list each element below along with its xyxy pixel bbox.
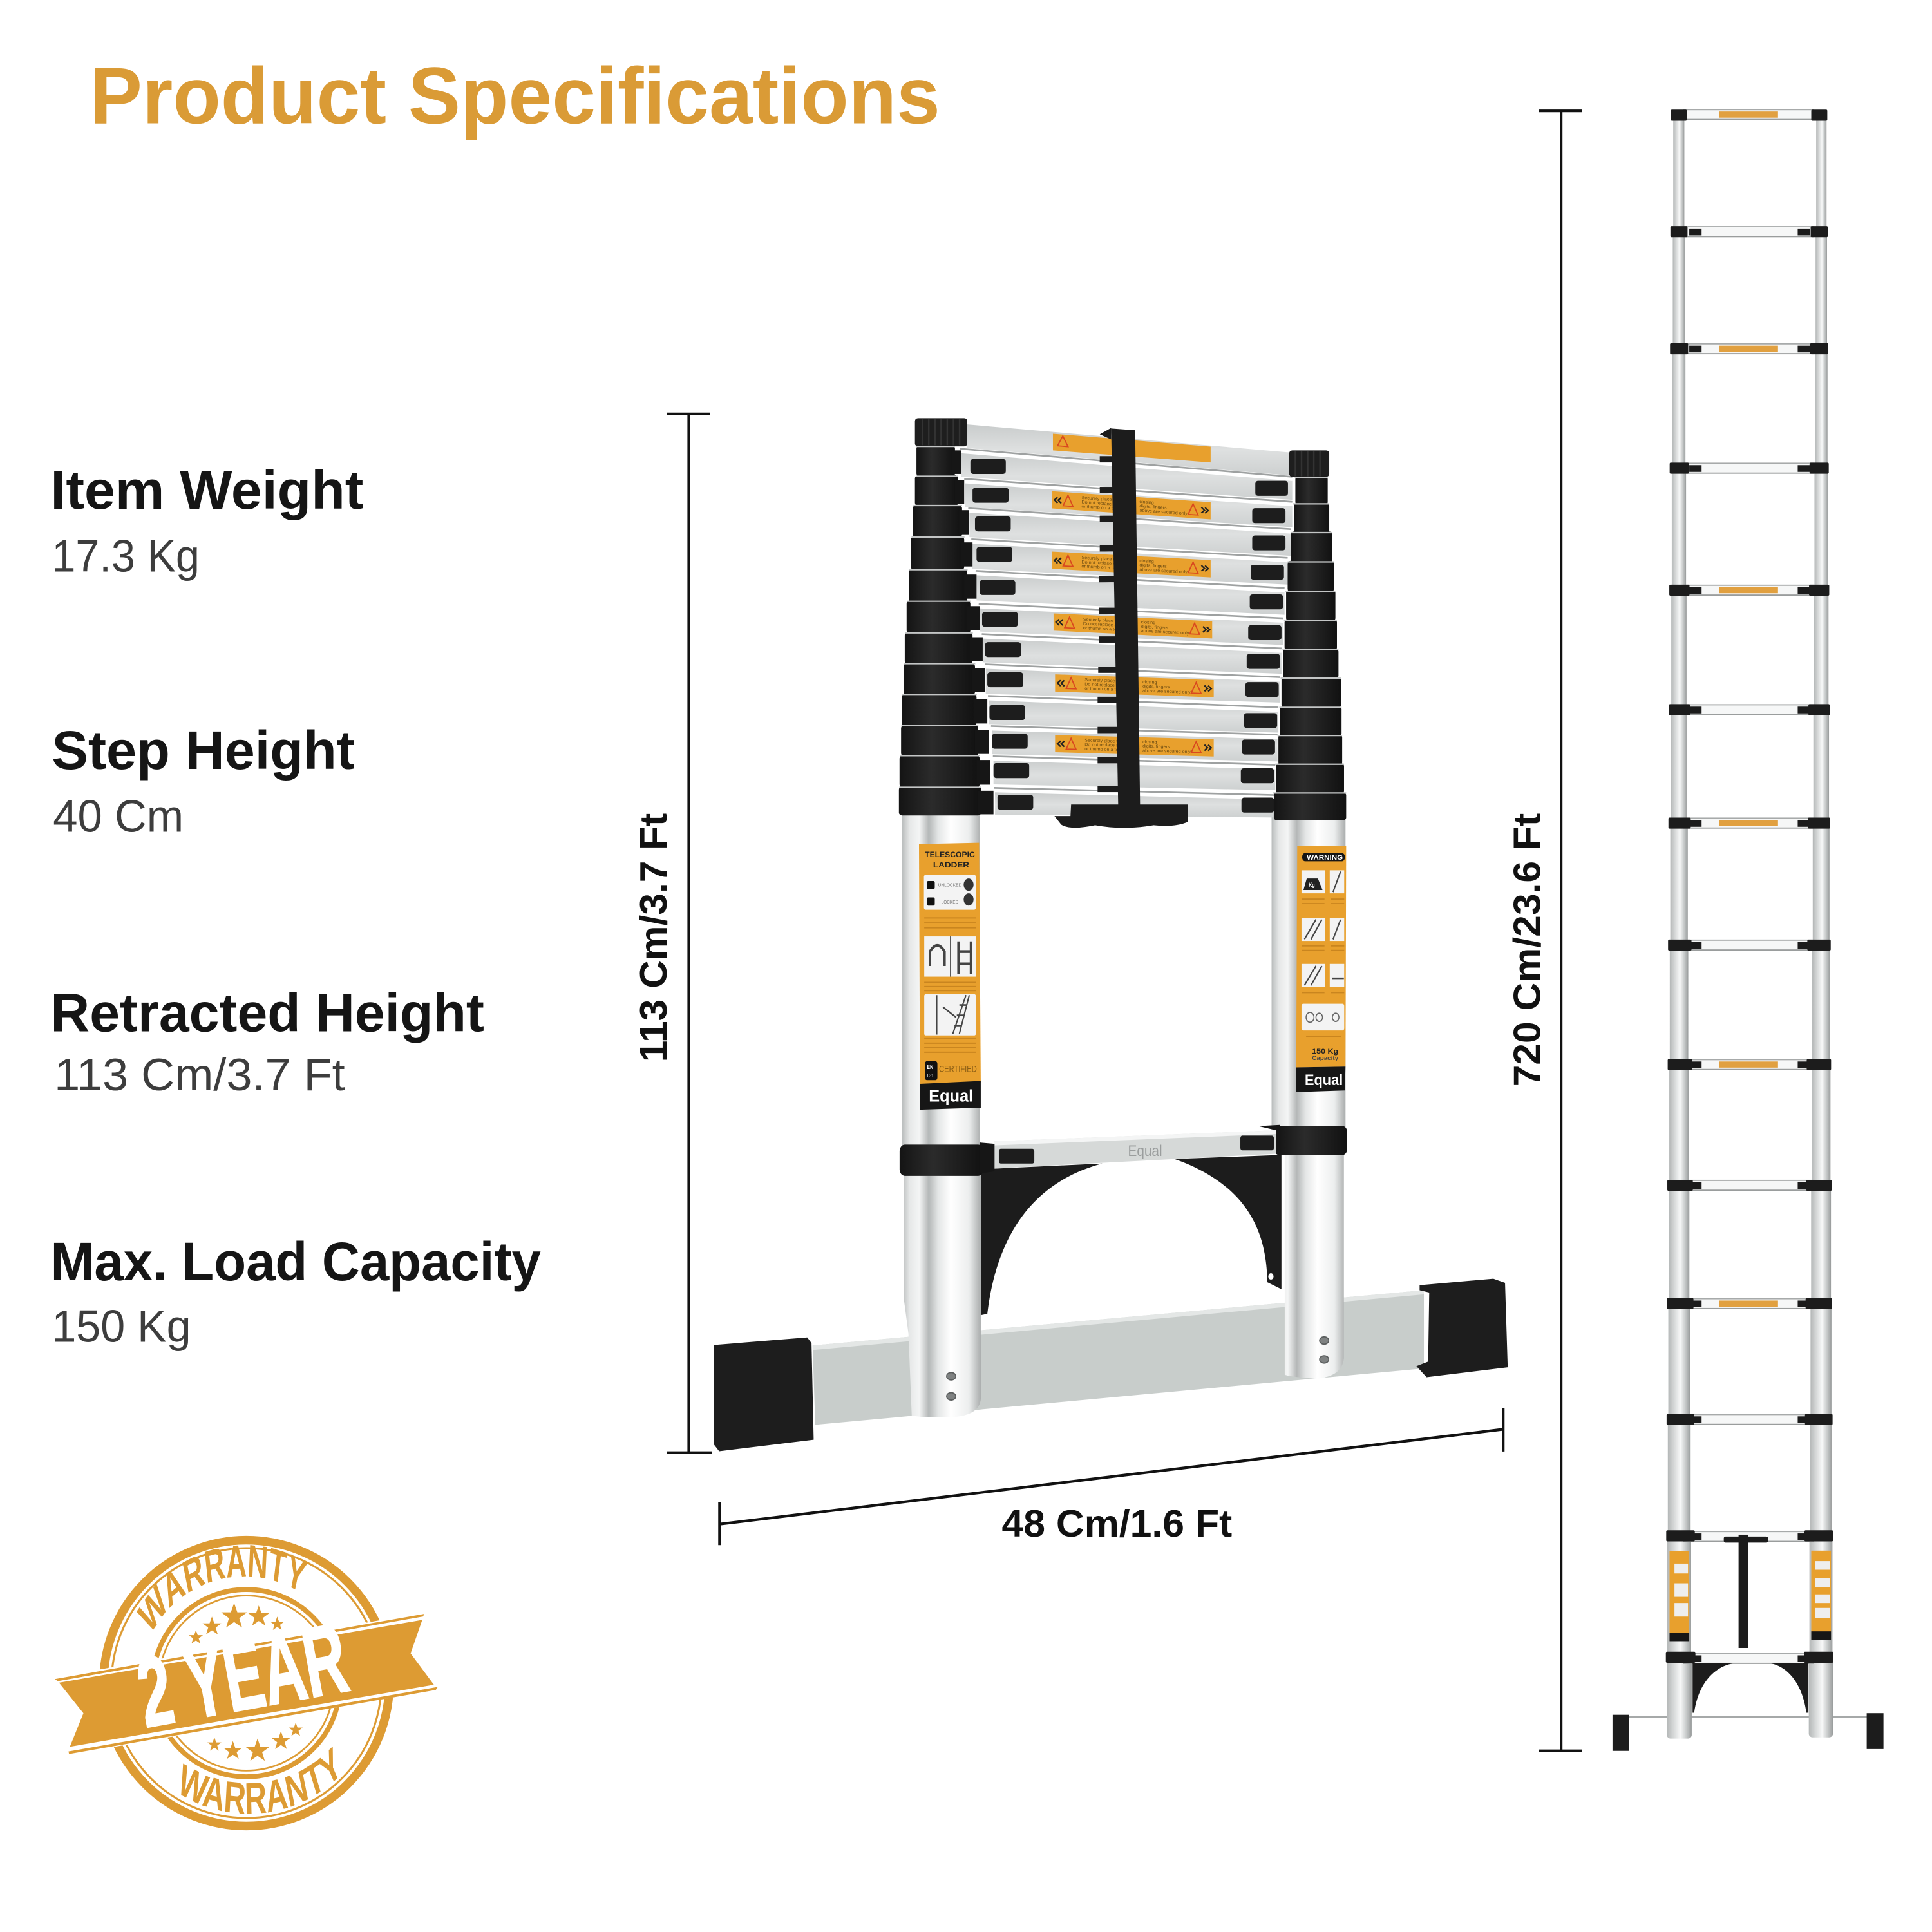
bracket: right arch: [1175, 1155, 1282, 1289]
warranty text top: WARRANTY: [137, 1545, 308, 1630]
sticker: telescopic ladder: 131: [927, 1072, 934, 1079]
sticker: warning: Kg: [1309, 882, 1315, 888]
spec: step height: 40 Cm: [53, 791, 184, 842]
sticker: telescopic ladder: LOCKED: [942, 900, 959, 905]
strap and T-handle: [1054, 428, 1188, 828]
right collars: [1273, 450, 1346, 820]
spec: retracted height: [50, 982, 484, 1101]
rungs: [1683, 109, 1814, 1664]
screws: [947, 1337, 1329, 1400]
pole stickers: [1669, 1551, 1831, 1641]
spec: retracted height: Retracted Height: [50, 982, 484, 1043]
spec: item weight: 17.3 Kg: [52, 531, 200, 582]
dimension: retracted height 113 cm: 113 Cm/3.7 Ft: [632, 813, 675, 1062]
rung stickers: [1719, 111, 1778, 1307]
stars: [189, 1603, 303, 1761]
mini brackets: [1692, 1663, 1808, 1712]
lower rung: [994, 1130, 1278, 1168]
retracted ladder: [714, 418, 1508, 1452]
left collars: [899, 418, 994, 815]
seal rings: [104, 1540, 390, 1826]
left collars: [1666, 109, 1696, 1663]
rope and T-handle: [1724, 1535, 1768, 1648]
spec: item weight: [50, 460, 363, 582]
left foot: [1613, 1715, 1629, 1751]
sticker: warning: WARNING: [1307, 854, 1343, 862]
left pole: [902, 812, 981, 1417]
lower rung: Equal: [1128, 1142, 1162, 1160]
right rail: [1809, 115, 1833, 1738]
ribbon: [53, 1612, 439, 1756]
sticker: telescopic ladder: EN: [927, 1064, 933, 1070]
right foot: [1867, 1713, 1884, 1749]
dimension: extended height 720 cm: [1506, 111, 1582, 1751]
spec: max load capacity: 150 Kg: [52, 1302, 191, 1352]
bracket: left arch: [981, 1164, 1103, 1315]
rung bars: [961, 424, 1293, 817]
base crossbar and feet: [714, 1279, 1508, 1452]
warranty badge: [55, 1535, 438, 1830]
warranty text bottom: WARRANTY: [181, 1747, 337, 1814]
title: Product Specifications: [90, 51, 940, 140]
spec: max load capacity: [50, 1231, 541, 1352]
dimension: width 48 cm: 48 Cm/1.6 Ft: [1001, 1502, 1233, 1545]
sticker: warning: Capacity: [1312, 1055, 1339, 1061]
spec: item weight: Item Weight: [50, 460, 363, 520]
left rail: [1667, 115, 1692, 1739]
spec: step height: [52, 720, 355, 842]
spec: step height: Step Height: [52, 720, 355, 781]
extended ladder: [1613, 109, 1884, 1751]
right pole: [1272, 812, 1345, 1379]
warning stickers: [1052, 433, 1214, 757]
dimension: extended height 720 cm: 720 Cm/23.6 Ft: [1506, 813, 1549, 1087]
sticker: warning: 150 Kg: [1312, 1048, 1338, 1056]
dimension: retracted height 113 cm: [632, 414, 712, 1453]
sticker: warning: Equal: [1305, 1071, 1343, 1088]
sticker: telescopic ladder: UNLOCKED: [938, 883, 962, 887]
rung handles: [971, 459, 1288, 813]
feet crossbar: [1627, 1716, 1869, 1718]
telescoped rungs: [899, 418, 1346, 828]
2 year text: 2 YEAR: [129, 1602, 355, 1748]
sticker: telescopic ladder: TELESCOPIC: [925, 851, 975, 859]
spec: max load capacity: Max. Load Capacity: [50, 1231, 541, 1292]
sticker: telescopic ladder: CERTIFIED: [939, 1064, 977, 1074]
right collars: [1804, 109, 1833, 1663]
sticker: telescopic ladder: Equal: [929, 1086, 973, 1105]
dimension: width 48 cm: [719, 1408, 1503, 1545]
rung highlights: [960, 449, 1293, 798]
sticker: telescopic ladder: LADDER: [933, 861, 969, 869]
sticker: warning: [1296, 846, 1346, 1092]
spec: retracted height: 113 Cm/3.7 Ft: [54, 1050, 345, 1101]
lower collars: [900, 1125, 1347, 1176]
sticker: telescopic ladder: [919, 843, 981, 1110]
poles, brackets and labels: [900, 812, 1347, 1417]
